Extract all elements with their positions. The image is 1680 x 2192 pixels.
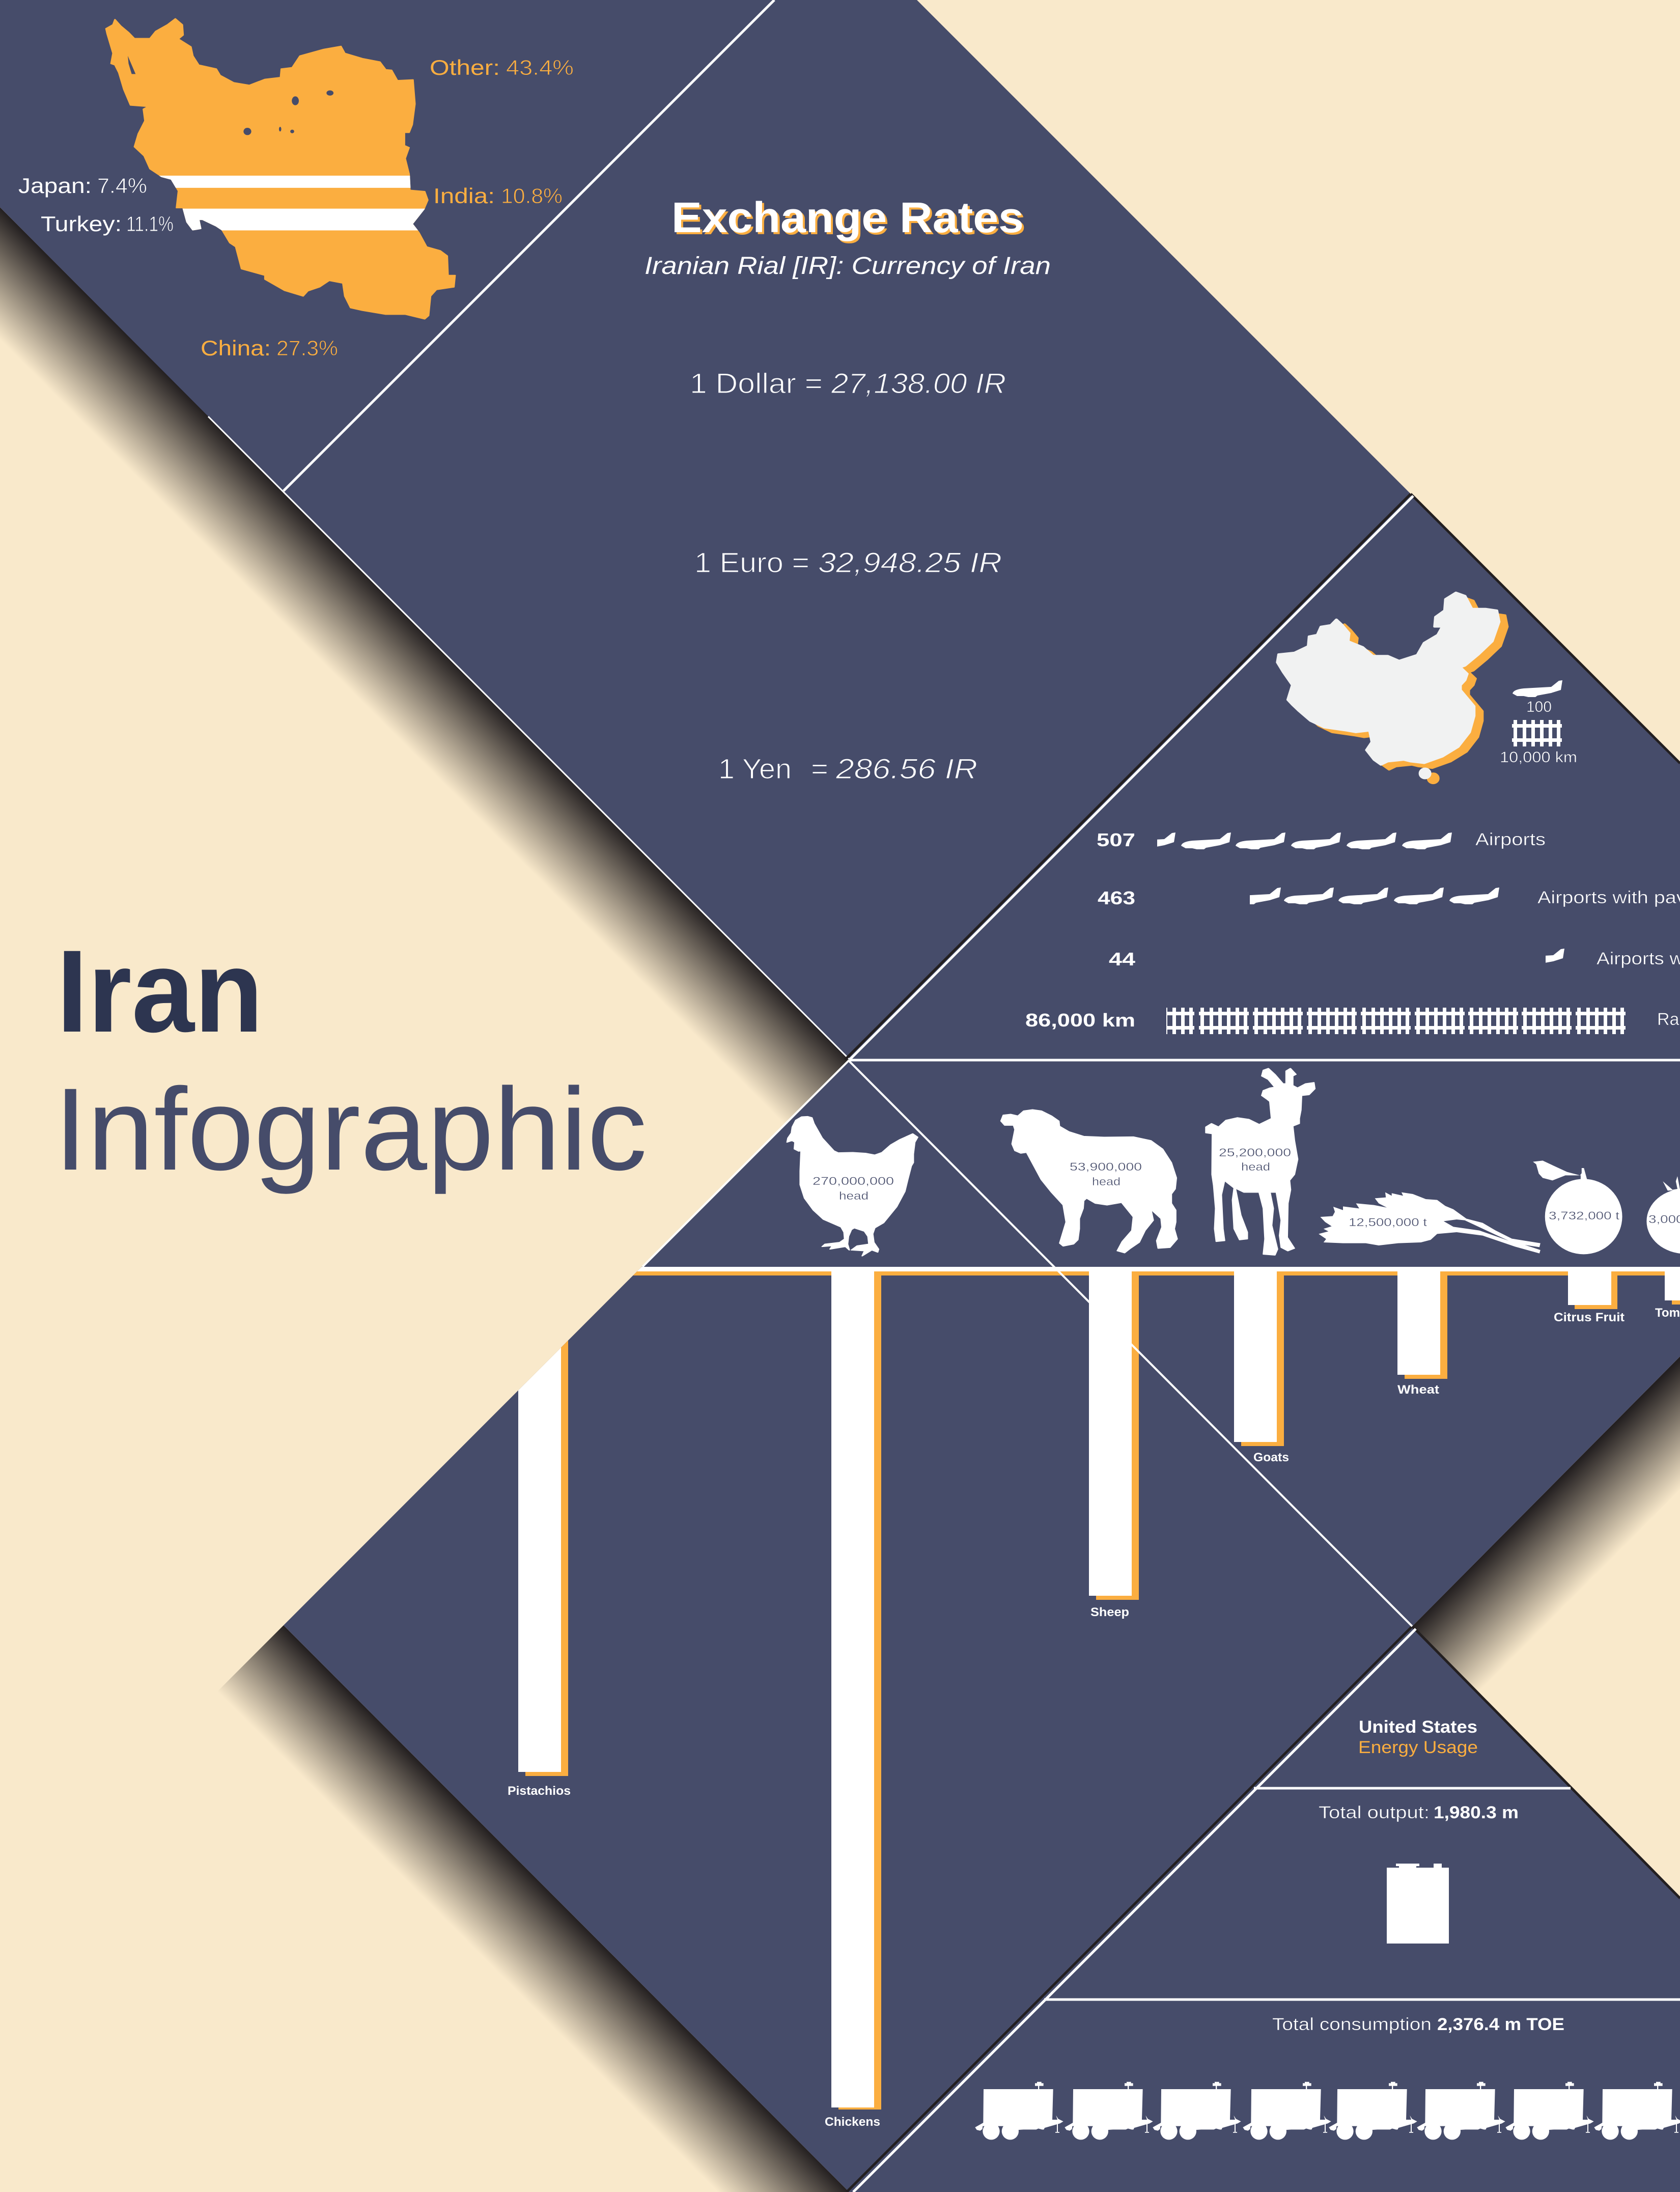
row: airports with unpaved runways 44: 44	[1109, 949, 1135, 969]
label: China	[201, 336, 338, 360]
label: China: 27.3%	[276, 336, 338, 360]
label: India: India:	[433, 184, 495, 208]
panel: upper navy band	[0, 0, 1680, 1060]
icon: wheat	[1319, 1192, 1541, 1254]
rate: euro	[694, 546, 1002, 578]
panel: exchange rates	[645, 193, 1051, 785]
stat: total output: Total output:	[1319, 1803, 1430, 1822]
label: Sheep: Sheep	[1090, 1605, 1129, 1619]
icon: wheat: 12,500,000 t	[1349, 1216, 1427, 1229]
row: railways 86,000 km: 86,000 km	[1025, 1010, 1135, 1031]
row: airports with paved runways 463: 463	[1098, 887, 1135, 908]
label: Wheat: Wheat	[1397, 1383, 1439, 1397]
icon row: tanker wagons	[975, 2082, 1680, 2140]
legend: rail equals 10,000 km: 10,000 km	[1500, 749, 1577, 766]
label: Turkey: Turkey:	[41, 212, 122, 236]
row: airports 507	[1097, 833, 1545, 849]
rate: euro: 32,948.25 IR	[818, 546, 1002, 578]
icon: sheep: 53,900,000	[1070, 1160, 1142, 1173]
label: Other: Other:	[430, 56, 500, 79]
shadow: lower left gradient	[217, 1625, 849, 2192]
map: China silhouette with orange shadow	[1277, 593, 1507, 783]
label: India	[433, 184, 563, 208]
panel: Iran trade partners map	[18, 19, 574, 360]
icon: goat	[1206, 1068, 1315, 1255]
label: Citrus Fruit: Citrus Fruit	[1554, 1311, 1625, 1324]
icon: sheep: head	[1092, 1175, 1121, 1188]
icon: goat: head	[1241, 1160, 1270, 1173]
heading: Energy Usage: Energy Usage	[1358, 1738, 1478, 1757]
legend: plane equals 100	[1513, 680, 1562, 715]
icon: chicken	[787, 1117, 918, 1256]
rate: euro: 1 Euro =	[694, 546, 809, 578]
legend: plane equals 100: 100	[1526, 699, 1552, 715]
shadow: upper diagonal gradient	[0, 207, 849, 1125]
label: Other: 43.4%	[506, 56, 574, 79]
stat: total output: 1,980.3 m	[1434, 1803, 1519, 1822]
map: Iran silhouette with white trade bands	[106, 19, 455, 319]
stat: total consumption: Total consumption	[1272, 2015, 1432, 2034]
label: Chickens: Chickens	[825, 2115, 880, 2129]
rate: dollar: 27,138.00 IR	[831, 367, 1006, 399]
shadow: right gradient	[1412, 1356, 1680, 1692]
label: Japan	[18, 174, 147, 198]
legend: rail equals 10,000 km	[1500, 720, 1577, 766]
rate: yen: =	[811, 753, 828, 785]
panel: United States energy usage	[975, 1717, 1680, 2140]
row: airports with unpaved runways 44	[1109, 949, 1680, 969]
row: airports 507: Airports	[1475, 830, 1546, 849]
subheading: currency: Iranian Rial [IR]: Currency of Iran	[645, 253, 1051, 280]
rate: yen: 286.56 IR	[835, 753, 977, 785]
panel: China transport	[1025, 593, 1680, 1034]
label: Goats: Goats	[1253, 1451, 1289, 1464]
stat: total output	[1319, 1803, 1519, 1822]
label: Pistachios: Pistachios	[508, 1784, 571, 1798]
heading: Exchange Rates: Exchange Rates	[674, 196, 1026, 243]
bar chart: production bars	[518, 1267, 1680, 2110]
rate: dollar	[690, 367, 1006, 399]
rate: yen	[718, 753, 977, 785]
row: railways 86,000 km	[1025, 1008, 1680, 1034]
label: China: China:	[201, 336, 271, 360]
label: Japan: Japan:	[18, 174, 92, 198]
icon: tomato	[1646, 1176, 1680, 1254]
icon: chicken: 270,000,000	[813, 1175, 894, 1187]
stat: total consumption: 2,376.4 m TOE	[1437, 2015, 1564, 2034]
label: India: 10.8%	[501, 184, 563, 208]
title: Iran: Iran	[57, 926, 263, 1057]
row: airports 507: 507	[1097, 829, 1135, 850]
icon: goat: 25,200,000	[1219, 1146, 1291, 1159]
panel: agriculture bar chart	[508, 1061, 1680, 2129]
label: Other	[430, 56, 574, 79]
heading: United States: United States	[1359, 1717, 1477, 1737]
icon: fuel canister	[1387, 1864, 1449, 1944]
label: Turkey	[41, 212, 174, 236]
icon: chicken: head	[839, 1189, 869, 1202]
row: airports with paved runways 463	[1098, 887, 1680, 908]
heading: Exchange Rates: Exchange Rates	[671, 193, 1024, 241]
title: Infographic: Infographic	[54, 1064, 647, 1195]
stat: total consumption	[1272, 2015, 1564, 2034]
rate: dollar: 1 Dollar =	[690, 367, 823, 399]
label: Turkey: 11.1%	[126, 212, 174, 236]
panel: lower navy band	[284, 1059, 1680, 2192]
rate: yen: 1 Yen	[718, 753, 792, 785]
label: Japan: 7.4%	[97, 174, 147, 198]
icon: sheep	[1001, 1109, 1177, 1253]
icon: citrus fruit: 3,732,000 t	[1549, 1209, 1619, 1222]
icon: citrus fruit	[1533, 1160, 1622, 1254]
